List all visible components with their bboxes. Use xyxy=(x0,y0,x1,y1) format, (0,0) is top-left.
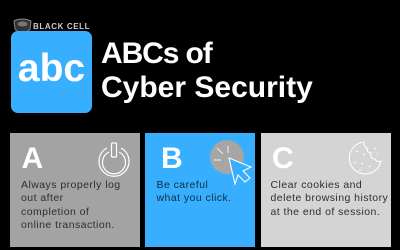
text: clear cookies xyxy=(270,179,388,218)
text: log out: online transaction. xyxy=(21,219,115,231)
icon: logo shield xyxy=(14,18,32,32)
letter A: A xyxy=(22,142,43,175)
icon: power button xyxy=(98,142,130,177)
abc tile text: abc xyxy=(18,47,85,90)
letter C: C xyxy=(272,142,294,175)
text: clear cookies: delete browsing history xyxy=(270,192,388,204)
title: Cyber Security xyxy=(101,71,313,104)
text: log out: Always properly log xyxy=(21,179,121,191)
icon: abc tile xyxy=(11,31,92,113)
logo: Black Cell xyxy=(14,18,90,32)
text: log out: out after xyxy=(21,192,64,204)
panel: A xyxy=(10,133,140,247)
icon: cookie xyxy=(348,142,382,174)
text: careful: what you click. xyxy=(156,192,232,204)
text: careful xyxy=(156,179,232,204)
text: clear cookies: at the end of session. xyxy=(270,206,380,218)
text: log out: completion of xyxy=(21,206,89,218)
text: careful: Be careful xyxy=(156,179,208,191)
logo wordmark: BLACK CELL xyxy=(33,22,90,31)
title xyxy=(101,37,313,104)
icon: mouse click xyxy=(210,140,252,186)
letter B: B xyxy=(161,142,183,175)
text: clear cookies: Clear cookies and xyxy=(270,179,362,191)
panel: C xyxy=(261,133,391,247)
text: log out xyxy=(21,179,121,231)
title: ABCs of xyxy=(101,37,212,70)
panel: B xyxy=(145,133,255,247)
